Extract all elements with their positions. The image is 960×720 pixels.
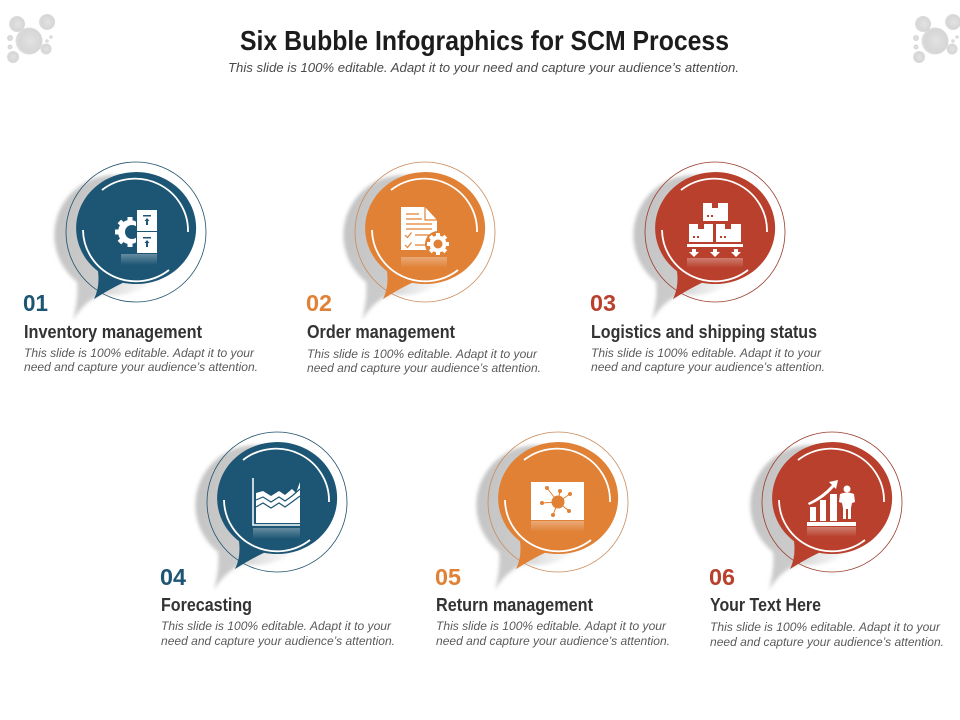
text block 03: need and capture your audience’s attention. <box>591 362 825 374</box>
subtitle: This slide is 100% editable. Adapt it to your need and capture your audience’s attention. <box>228 60 739 75</box>
text block 01: 01 <box>23 290 48 316</box>
text block 05: 05 <box>435 564 461 590</box>
text block 02 <box>306 290 541 375</box>
text block 06 <box>709 564 944 649</box>
text block 05: need and capture your audience’s attention. <box>436 636 670 648</box>
icon: area chart <box>253 478 300 539</box>
text block 06: Your Text Here <box>710 595 821 615</box>
bubble 03: logistics and shipping <box>633 162 785 320</box>
text block 05: Return management <box>436 595 593 615</box>
decoration: bubbles top left <box>7 14 55 63</box>
text block 01: This slide is 100% editable. Adapt it to your <box>24 348 255 360</box>
text block 01: Inventory management <box>24 322 202 342</box>
text block 06: need and capture your audience’s attention. <box>710 637 944 649</box>
text block 06: 06 <box>709 564 735 590</box>
text block 03: 03 <box>590 290 616 316</box>
text block 02: 02 <box>306 290 332 316</box>
bubble 04: forecasting <box>195 432 347 590</box>
text block 02: need and capture your audience’s attention. <box>307 363 541 375</box>
text block 01: need and capture your audience’s attention. <box>24 362 258 374</box>
text block 01 <box>23 290 258 374</box>
text block 04: 04 <box>160 564 186 590</box>
text block 02: This slide is 100% editable. Adapt it to your <box>307 349 538 361</box>
bubble 06: your text here <box>750 432 902 590</box>
bubble 02: order management <box>343 162 495 320</box>
text block 06: This slide is 100% editable. Adapt it to your <box>710 622 941 634</box>
icon: document with gear <box>401 207 451 268</box>
text block 02: Order management <box>307 322 455 342</box>
bubble 01: inventory management <box>54 162 206 320</box>
text block 03: This slide is 100% editable. Adapt it to your <box>591 348 822 360</box>
title: Six Bubble Infographics for SCM Process <box>240 25 729 56</box>
text block 03: Logistics and shipping status <box>591 322 817 342</box>
icon: gear and boxes <box>115 209 158 265</box>
text block 05: This slide is 100% editable. Adapt it to your <box>436 621 667 633</box>
bubble 05: return management <box>476 432 628 590</box>
icon: stacked boxes with arrows <box>687 203 743 268</box>
text block 04: Forecasting <box>161 595 252 615</box>
text block 03 <box>590 290 825 374</box>
text block 05 <box>435 564 670 648</box>
text block 04 <box>160 564 395 648</box>
decoration: bubbles top right <box>913 14 960 63</box>
icon: network on screen <box>531 482 584 532</box>
icon: growth chart with person <box>807 480 856 537</box>
text block 04: need and capture your audience’s attention. <box>161 636 395 648</box>
text block 04: This slide is 100% editable. Adapt it to your <box>161 621 392 633</box>
